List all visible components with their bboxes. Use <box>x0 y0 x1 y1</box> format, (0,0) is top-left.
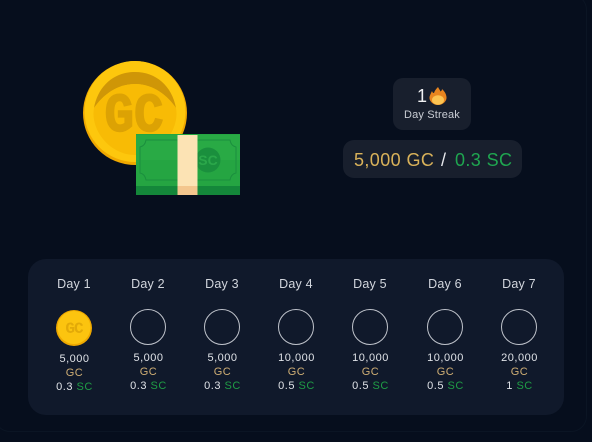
text: 0.5 SC <box>352 380 389 392</box>
panel: seven-day rewards <box>28 259 564 415</box>
text: 0.3 SC <box>130 380 167 392</box>
text: 10,000 <box>278 352 315 364</box>
text: 0.5 SC <box>427 380 464 392</box>
day 1 column: GC <box>65 320 84 338</box>
text: 5,000 <box>133 352 164 364</box>
sweeps coin amount: 0.3 SC <box>455 150 512 170</box>
icon: green banknotes: SC <box>198 152 218 168</box>
text: GC <box>140 366 157 378</box>
day 2 column: Day 2 <box>131 277 165 291</box>
text: 20,000 <box>501 352 538 364</box>
current reward pill <box>343 140 522 178</box>
text: 0.5 SC <box>278 380 315 392</box>
text: 1 SC <box>506 380 533 392</box>
text: GC <box>214 366 231 378</box>
day 1 column: GC <box>66 367 83 379</box>
icon: gold coin <box>83 61 187 165</box>
streak count: 1 <box>417 86 427 106</box>
text: GC <box>362 366 379 378</box>
day streak badge <box>393 78 471 130</box>
day 1 column: 5,000 <box>59 353 90 365</box>
icon: flame <box>430 87 446 105</box>
text: 10,000 <box>352 352 389 364</box>
day 7 column: Day 7 <box>502 277 536 291</box>
day 5 column: Day 5 <box>353 277 387 291</box>
gold coin amount: 5,000 GC <box>354 150 434 170</box>
text: 0.3 SC <box>204 380 241 392</box>
icon: gold coin: GC <box>104 85 164 148</box>
icon: green banknotes <box>136 134 240 195</box>
streak label: Day Streak <box>404 109 460 121</box>
reward illustration: coin and banknotes <box>83 61 240 195</box>
text: 10,000 <box>427 352 464 364</box>
day 1 column <box>56 277 93 393</box>
text: GC <box>288 366 305 378</box>
text: GC <box>437 366 454 378</box>
separator: / <box>441 150 446 170</box>
day 4 column: Day 4 <box>279 277 313 291</box>
text: 5,000 <box>207 352 238 364</box>
day 1 column: 0.3 SC <box>56 381 93 393</box>
text: GC <box>511 366 528 378</box>
day 1 column: Day 1 <box>57 277 91 291</box>
day 3 column: Day 3 <box>205 277 239 291</box>
day 6 column: Day 6 <box>428 277 462 291</box>
